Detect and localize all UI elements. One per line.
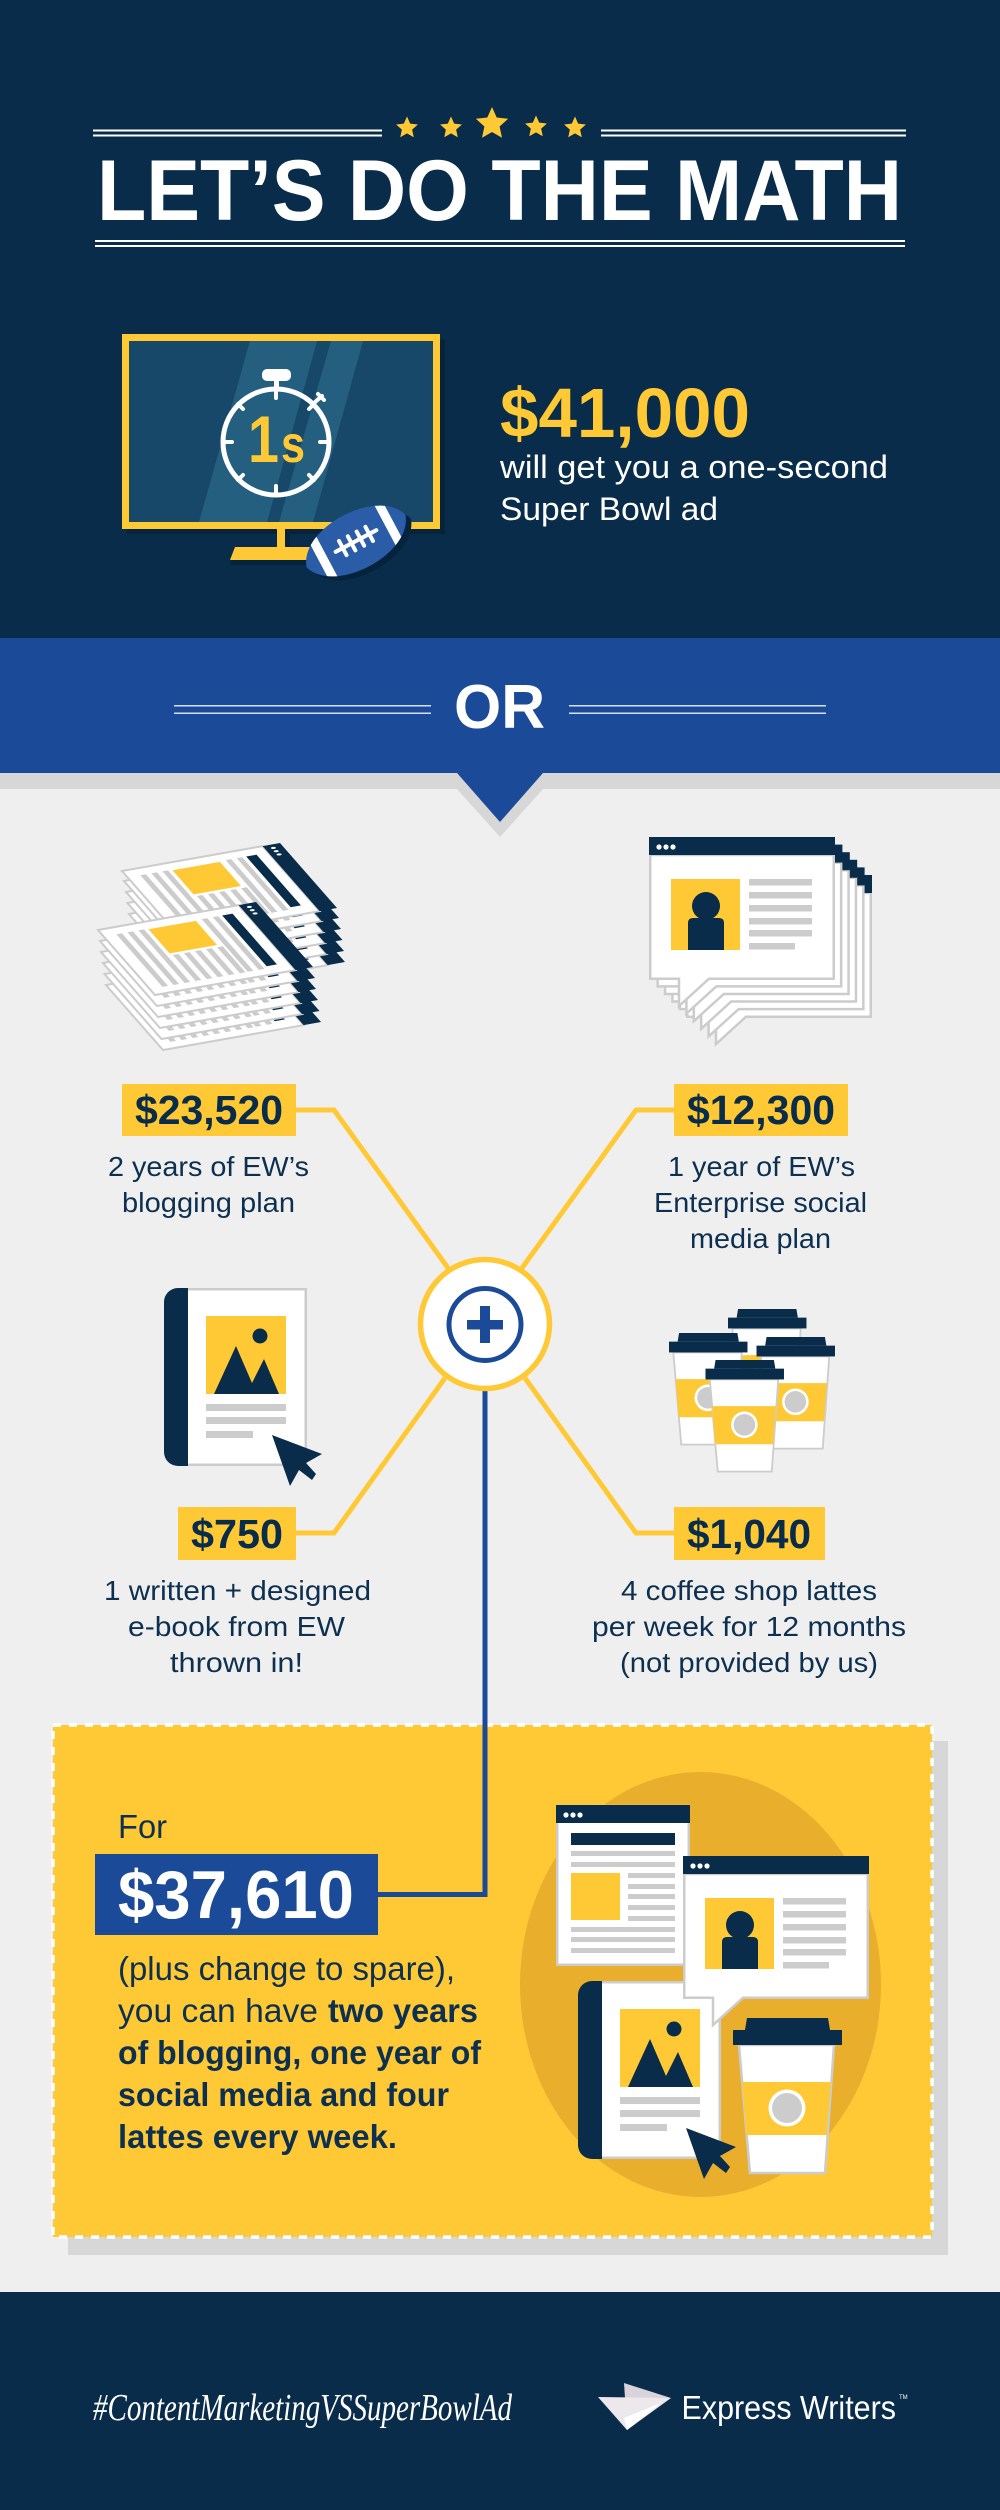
summary text: of blogging, one year of	[118, 2034, 482, 2071]
description	[104, 1575, 371, 1678]
description: Enterprise social	[654, 1187, 867, 1218]
stopwatch label	[248, 402, 305, 476]
description: thrown in!	[170, 1647, 303, 1678]
title rules bottom	[95, 240, 905, 247]
item: social media plan	[654, 1084, 867, 1254]
panel: header	[0, 0, 1000, 638]
price tag: $12,300	[687, 1087, 835, 1133]
description: e-book from EW	[128, 1611, 346, 1642]
icon: stack of social media posts	[649, 837, 872, 1044]
icon: coffee cup	[733, 2018, 842, 2173]
price tag	[178, 1507, 296, 1560]
price tag: $750	[191, 1511, 283, 1557]
illustration: bundle of services	[520, 1772, 881, 2197]
text: For: For	[118, 1808, 167, 1845]
description: (not provided by us)	[620, 1647, 878, 1678]
connectors: yellow spokes	[296, 1110, 674, 1533]
icon: paper plane logo	[598, 2383, 671, 2430]
stopwatch label: 1	[248, 402, 279, 476]
item: e-book	[104, 1507, 371, 1678]
summary text: lattes every week.	[118, 2118, 397, 2155]
price: $37,610: $37,610	[118, 1857, 354, 1933]
icon: five stars	[396, 107, 586, 138]
text: one-second ad: will get you a one-second	[499, 449, 888, 485]
trademark: TM	[899, 2395, 908, 2401]
description: 1 written + designed	[104, 1575, 371, 1606]
title: LET’S DO THE MATH	[97, 143, 902, 239]
icon: stacks of blog pages	[98, 843, 345, 1050]
description: 4 coffee shop lattes	[621, 1575, 877, 1606]
description: 1 year of EW’s	[668, 1151, 855, 1182]
panel: footer	[0, 2292, 1000, 2510]
blue connector	[378, 1391, 485, 1894]
summary text: (plus change to spare),	[118, 1950, 455, 1987]
icon: television with stopwatch	[126, 338, 445, 565]
text: one-second ad: Super Bowl ad	[500, 491, 718, 527]
title rules top	[93, 130, 906, 136]
stopwatch label: s	[281, 416, 305, 474]
heading: OR: OR	[454, 673, 545, 742]
description	[108, 1151, 309, 1218]
price tag: $1,040	[687, 1511, 811, 1557]
price tag: $23,520	[135, 1087, 283, 1133]
description: 2 years of EW’s	[108, 1151, 309, 1182]
summary text: two years	[328, 1992, 478, 2029]
panel: OR band	[0, 638, 1000, 837]
price: $41,000: $41,000	[500, 374, 750, 452]
brand name: Express Writers	[682, 2389, 896, 2426]
text: one-second ad	[499, 449, 888, 527]
panel: summary	[53, 1391, 948, 2255]
summary text: you can have	[118, 1992, 318, 2029]
icon: e-book with cursor	[578, 1981, 736, 2179]
icon: plus circle	[420, 1260, 550, 1388]
icon: social media bubble	[683, 1856, 869, 2025]
icon: football	[306, 506, 412, 580]
icon: four coffee cups	[669, 1309, 835, 1472]
icon: stopwatch	[223, 369, 329, 495]
description: media plan	[690, 1223, 831, 1254]
hashtag: #ContentMarketingVSSuperBowlAd	[93, 2387, 513, 2429]
description: blogging plan	[122, 1187, 295, 1218]
description	[654, 1151, 867, 1254]
icon: blog window	[556, 1805, 690, 1965]
summary text: social media and four	[118, 2076, 449, 2113]
description	[592, 1575, 906, 1678]
summary text	[118, 1950, 482, 2155]
description: per week for 12 months	[592, 1611, 906, 1642]
icon: e-book with cursor	[164, 1288, 322, 1486]
item: lattes	[592, 1507, 906, 1678]
item: blogging plan	[108, 1084, 309, 1218]
